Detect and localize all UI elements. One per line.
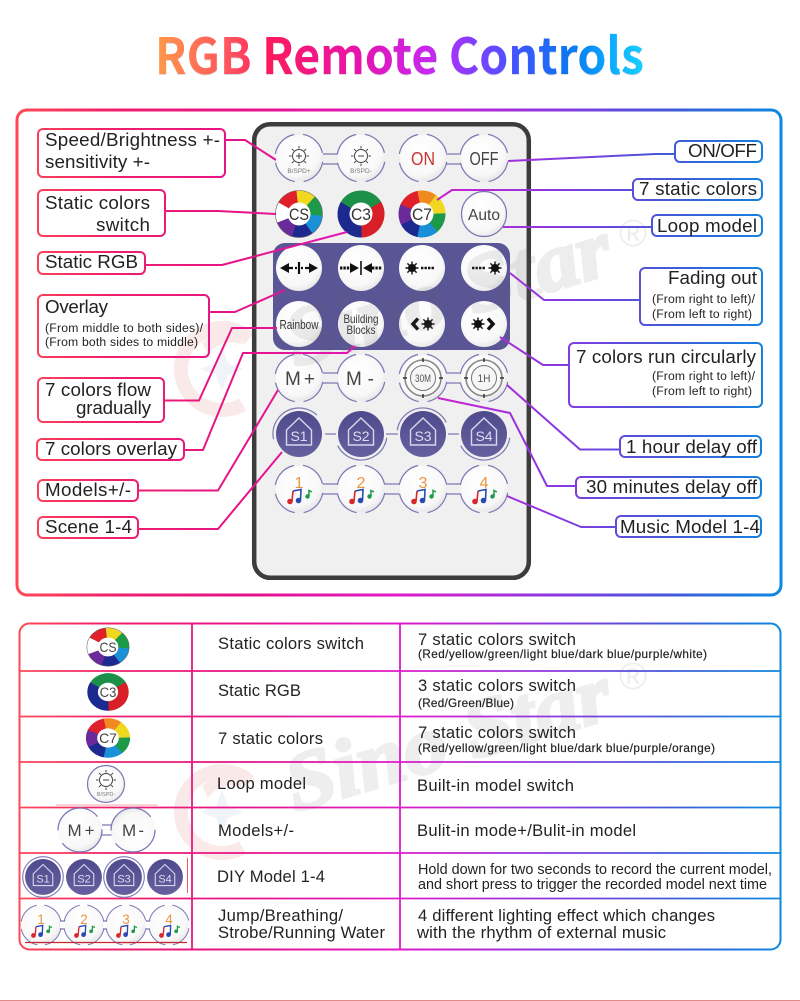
row: static RGB: 3 static colors switch: [418, 676, 576, 695]
button: brightness plus: [271, 130, 327, 186]
button: run left to right: [461, 301, 507, 347]
callout: fading out: Fading out: [668, 267, 758, 288]
button: S4: [454, 404, 514, 464]
callout: 7 static colors: 7 static colors: [639, 178, 757, 199]
row: models: Bulit-in mode+/Bulit-in model: [417, 821, 636, 840]
button: C3: [338, 191, 384, 237]
panel: remote control diagram: [17, 110, 781, 595]
callout: overlay: [38, 290, 285, 357]
icon: C3: C3: [100, 685, 116, 701]
row: DIY model: and short press to trigger the recorded model next time: [418, 877, 767, 893]
callout: overlay: (From middle to both sides)/: [45, 321, 204, 335]
icon: S buttons: [23, 857, 188, 897]
callout: fading out: (From left to right): [652, 307, 752, 321]
icon: S buttons: S3: [117, 873, 131, 885]
icon: sun button: B/SPD-: [97, 792, 115, 798]
row: DIY model: DIY Model 1-4: [217, 867, 325, 886]
row: music: Jump/Breathing/: [218, 906, 343, 925]
callout: scene: Scene 1-4: [45, 516, 132, 537]
button: music 2: 2: [357, 475, 366, 492]
icon: music buttons: [17, 901, 193, 949]
callout: 1 hour delay: [507, 385, 761, 457]
button panel: [273, 243, 510, 350]
watermark: Sino Star: [274, 202, 622, 384]
row: static colors switch: Static colors switch: [218, 634, 364, 653]
button: C7: C7: [412, 205, 432, 224]
icon: sun button: [88, 766, 124, 802]
callout: on off: ON/OFF: [688, 140, 757, 161]
button: S2: [331, 404, 391, 464]
row: models: [56, 805, 636, 852]
button: S1: [269, 404, 329, 464]
icon: C7: [86, 718, 130, 758]
table watermark: [166, 647, 647, 868]
callout: 30 minutes delay: 30 minutes delay off: [586, 476, 758, 497]
connector stubs: scenes: [325, 433, 459, 435]
callout: speed brightness: Speed/Brightness +-: [45, 129, 220, 150]
row: static RGB: Static RGB: [218, 681, 301, 700]
callout: static colors switch: switch: [96, 214, 150, 235]
button: M plus: M+: [285, 369, 315, 390]
row: music: [17, 901, 715, 949]
button: brightness minus: B/SPD-: [350, 168, 372, 175]
callout: overlay: Overlay: [45, 296, 109, 317]
callout: loop model: Loop model: [657, 215, 757, 236]
button: CS: [275, 190, 323, 238]
button: S3: [393, 404, 453, 464]
button: off: [456, 130, 512, 186]
button: S1: S1: [290, 428, 308, 444]
icon: C3: [88, 673, 128, 711]
callout: 7 colors flow gradually: gradually: [76, 397, 152, 418]
button: music 3: 3: [419, 475, 428, 492]
callout: fading out: [510, 267, 762, 325]
row: static RGB: [88, 673, 576, 711]
button: CS: CS: [289, 205, 309, 224]
callout: speed brightness: sensitivity +-: [45, 151, 150, 172]
row: static colors switch: 7 static colors switch: [418, 630, 576, 649]
button: 1 hour timer: 1H: [478, 373, 491, 385]
row: 7 static colors: 7 static colors: [218, 729, 323, 748]
icon: M buttons: M-: [122, 821, 144, 840]
button: building blocks: Blocks: [346, 323, 376, 337]
button: M plus: [271, 350, 327, 406]
icon: CS: [86, 627, 130, 667]
callout: static colors switch: Static colors: [45, 192, 150, 213]
button: music 4: [456, 461, 512, 517]
row: loop model: Built-in model switch: [417, 776, 574, 795]
button: 1 hour timer: [456, 350, 512, 406]
row: music: 4 different lighting effect which changes: [418, 906, 715, 925]
button: S3: S3: [414, 428, 432, 444]
callout: music model: [507, 496, 761, 537]
button: music 3: [395, 461, 451, 517]
remote body: [254, 124, 529, 578]
button: 30 minute timer: 30M: [415, 373, 431, 385]
row: 7 static colors: [86, 718, 715, 758]
button: brightness minus: [333, 130, 389, 186]
button: run right to left: [399, 301, 445, 347]
button: building blocks: Building: [344, 312, 378, 326]
button: brightness plus: B/SPD+: [287, 168, 311, 175]
button: on: ON: [411, 149, 435, 169]
row: 7 static colors: 7 static colors switch: [418, 723, 576, 742]
row: 7 static colors: (Red/yellow/green/light blue/dark blue/purple/orange): [418, 742, 715, 755]
icon: music buttons: 4: [165, 912, 173, 927]
row: music: with the rhythm of external music: [416, 923, 666, 942]
icon: CS: CS: [99, 640, 117, 656]
callout: models: Models+/-: [45, 479, 131, 500]
watermark logo: [166, 313, 278, 425]
button: music 1: [271, 461, 327, 517]
callout: models: [38, 390, 278, 501]
table grid: [19, 623, 781, 950]
callout: scene: [38, 452, 282, 538]
button: M minus: M-: [346, 369, 374, 390]
callout: 7 colors run circularly: (From right to left)/: [652, 369, 756, 383]
button: building blocks: [338, 301, 384, 347]
icon: S buttons: S1: [36, 873, 50, 885]
icon: music buttons: 3: [122, 912, 130, 927]
title: RGB Remote Controls: [155, 17, 644, 89]
callout: 7 colors flow gradually: [38, 328, 277, 422]
callout: 7 colors flow gradually: 7 colors flow: [45, 379, 151, 400]
bottom edge line: [0, 1000, 800, 1001]
row: loop model: [88, 766, 574, 802]
button: C3: C3: [351, 205, 371, 224]
watermark: ®: [619, 213, 647, 255]
callout: 7 colors run circularly: [500, 337, 762, 407]
callout: music model: Music Model 1-4: [620, 516, 760, 537]
button: S4: S4: [475, 428, 493, 444]
button: rainbow: [276, 301, 322, 347]
button: music 2: [333, 461, 389, 517]
table: button functions: [17, 623, 781, 950]
callout: static RGB: [38, 232, 347, 274]
button: fade right to left: [399, 245, 445, 291]
row: DIY model: [23, 857, 772, 897]
callout: speed brightness: [38, 129, 276, 177]
row: music: Strobe/Running Water: [218, 923, 385, 942]
button: C7: [398, 190, 446, 238]
callout: static RGB: Static RGB: [45, 251, 138, 272]
button: M minus: [333, 350, 389, 406]
row: static colors switch: [86, 627, 707, 667]
connector stubs: [323, 154, 461, 494]
table watermark: ®: [619, 656, 647, 698]
callout: 7 colors overlay: [37, 346, 355, 460]
callout: on off: [508, 140, 762, 162]
button: overlay outward: [276, 245, 322, 291]
button: S2: S2: [352, 428, 370, 444]
table watermark: Sino Star: [274, 647, 622, 829]
callout: 30 minutes delay: [438, 398, 761, 498]
callout: 7 colors run circularly: (From left to right): [652, 384, 752, 398]
callout: fading out: (From right to left)/: [652, 292, 756, 306]
callout: 7 colors run circularly: 7 colors run circularly: [576, 346, 757, 367]
button: overlay inward: [338, 245, 384, 291]
icon: music buttons: 2: [80, 912, 88, 927]
icon: C7: C7: [99, 731, 117, 747]
panel border: [17, 110, 781, 595]
button: on: [395, 130, 451, 186]
button: 30 minute timer: [395, 350, 451, 406]
button: rainbow: Rainbow: [280, 317, 319, 332]
button: music 1: 1: [295, 475, 304, 492]
callout: overlay: (From both sides to middle): [45, 335, 198, 349]
button: auto: [462, 192, 506, 236]
icon: S buttons: S2: [77, 873, 91, 885]
callout: 7 static colors: [437, 178, 762, 200]
button: off: OFF: [470, 149, 498, 169]
icon: M buttons: M+: [68, 821, 95, 840]
row: models: Models+/-: [218, 821, 294, 840]
button: music 4: 4: [480, 475, 489, 492]
callout: loop model: [503, 215, 762, 236]
row: loop model: Loop model: [217, 774, 306, 793]
icon: S buttons: S4: [158, 873, 172, 885]
icon: M buttons: [56, 805, 157, 852]
row: DIY model: Hold down for two seconds to record the current model,: [418, 862, 772, 878]
row: static RGB: (Red/Green/Blue): [418, 697, 514, 710]
icon: music buttons: 1: [37, 912, 45, 927]
button: fade left to right: [461, 245, 507, 291]
row: static colors switch: (Red/yellow/green/light blue/dark blue/purple/white): [418, 648, 707, 661]
button: auto: Auto: [468, 207, 500, 224]
callout: static colors switch: [38, 190, 276, 236]
callout: 1 hour delay: 1 hour delay off: [626, 436, 758, 457]
callout: 7 colors overlay: 7 colors overlay: [45, 438, 178, 459]
